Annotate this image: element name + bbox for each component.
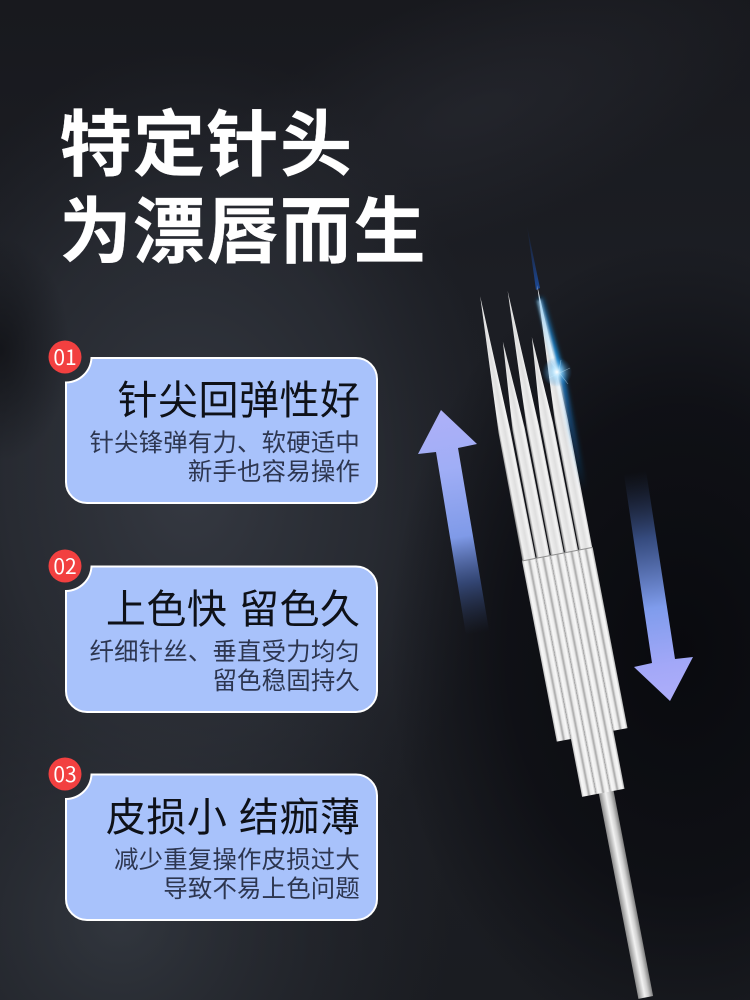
description 02: 纤细针丝、垂直受力均匀: [90, 639, 360, 666]
description 02: [90, 639, 360, 695]
description 01: 针尖锋弹有力、软硬适中: [90, 430, 360, 457]
title: 特定针头: [60, 106, 354, 186]
card 03 background: [66, 774, 377, 920]
badge 02: [48, 550, 82, 582]
description 02: 留色稳固持久: [212, 668, 360, 695]
badge 02: 02: [53, 551, 77, 581]
card 02 background: [66, 566, 377, 712]
description 01: [90, 430, 360, 486]
title: [60, 106, 427, 273]
description 03: 减少重复操作皮损过大: [114, 847, 360, 874]
badge 03: [48, 758, 82, 790]
panel: card 03: [48, 758, 377, 920]
heading 03: 皮损小 结痂薄: [106, 796, 360, 840]
badge 03: 03: [53, 759, 77, 789]
card 01 background: [66, 358, 377, 503]
collar edge: [522, 547, 593, 561]
panel: card 01: [48, 340, 377, 503]
light streak: [527, 226, 540, 290]
heading 01: 针尖回弹性好: [118, 379, 360, 423]
needle tips: [472, 284, 593, 561]
icon: needle cluster: [471, 226, 678, 1000]
title: 为漂唇而生: [60, 193, 427, 273]
panel: card 02: [48, 550, 377, 712]
heading 02: 上色快 留色久: [106, 588, 360, 632]
badge 01: 01: [53, 342, 77, 372]
tubes: centre: [536, 550, 625, 797]
description 01: 新手也容易操作: [188, 459, 360, 486]
description 03: [114, 847, 360, 903]
tube: left: [522, 558, 571, 742]
tube: right: [579, 547, 627, 731]
blue glow: [539, 298, 584, 490]
badge 01: [48, 340, 82, 374]
arrow: up: [418, 410, 490, 641]
description 03: 导致不易上色问题: [163, 876, 360, 903]
shaft: [598, 788, 653, 999]
arrow: down: [623, 464, 693, 701]
